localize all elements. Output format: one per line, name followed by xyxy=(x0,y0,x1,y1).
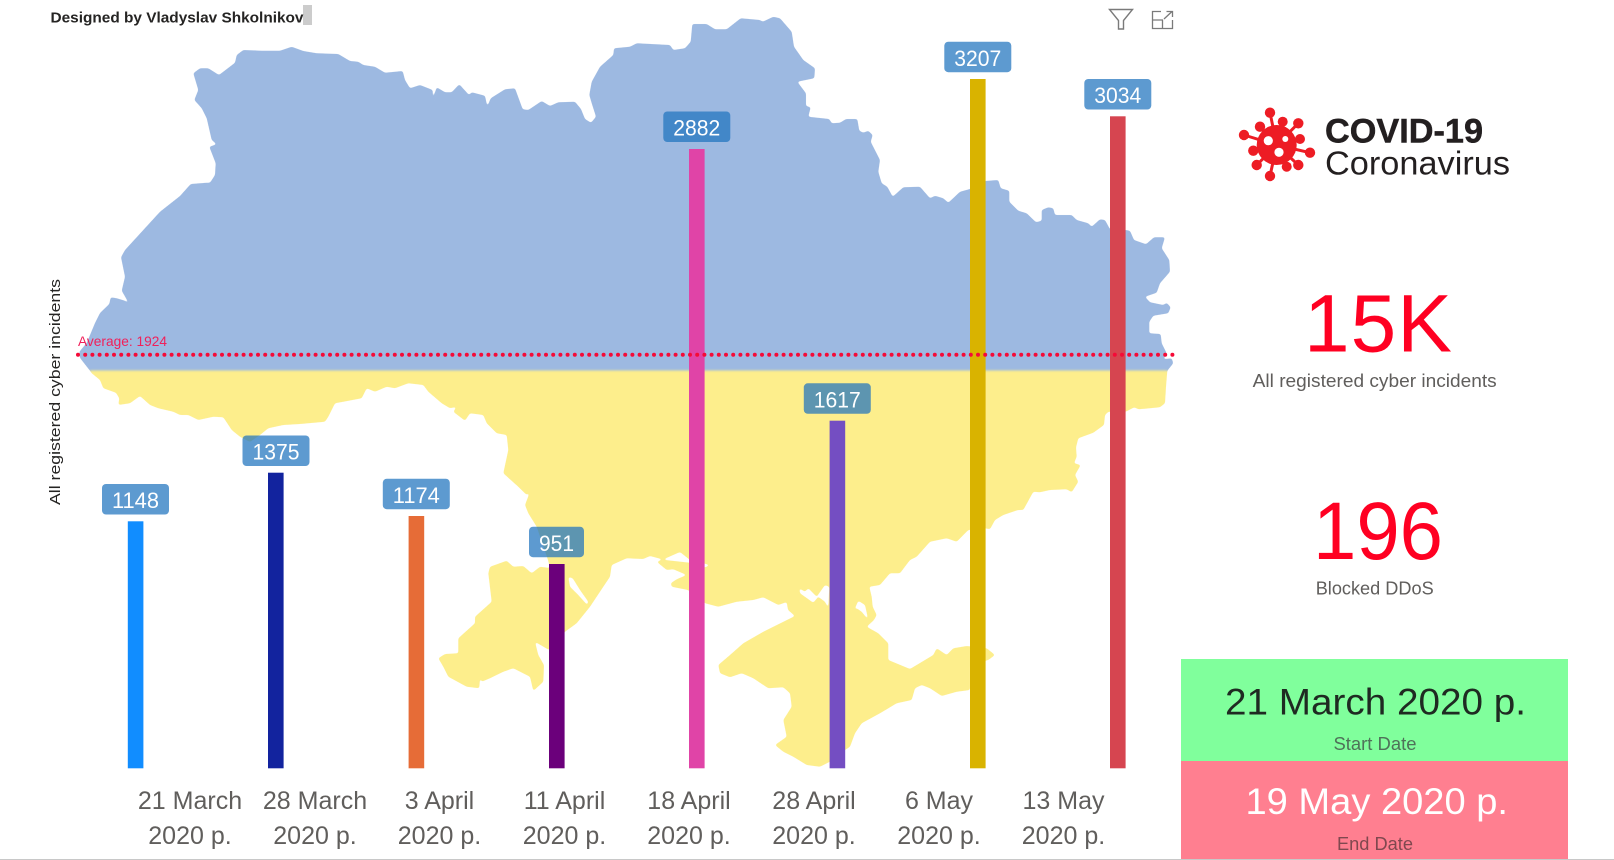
bar: 13 May: 3034 xyxy=(1094,83,1141,108)
logo: COVID-19 Coronavirus xyxy=(1239,108,1510,182)
KPI: all registered cyber incidents: All registered cyber incidents xyxy=(1253,370,1497,391)
x axis labels: 11 April xyxy=(524,787,605,815)
bar: 28 March: 1375 xyxy=(252,440,300,465)
bar: 3 April: 1174 xyxy=(393,483,440,508)
bar: 21 March: 1148 xyxy=(112,488,159,513)
bar: 6 May xyxy=(944,42,1011,768)
x axis labels: 28 March xyxy=(263,787,367,815)
x axis labels: 6 May xyxy=(905,787,974,815)
bar: 28 March xyxy=(242,436,310,768)
panel: start date xyxy=(1181,659,1568,761)
panel: end date: 19 May 2020 р. xyxy=(1246,781,1508,822)
bar: 18 April xyxy=(663,112,730,768)
panel: end date xyxy=(1181,761,1568,859)
x axis labels: 3 April xyxy=(405,787,474,815)
average line: Average: 1924 xyxy=(78,333,167,349)
KPI: blocked DDoS: 196 xyxy=(1313,486,1443,577)
x axis labels: 13 May xyxy=(1023,787,1105,815)
bar: 6 May: 3207 xyxy=(954,46,1001,71)
axis title: All registered cyber incidents xyxy=(47,279,64,505)
icon: filter xyxy=(1110,10,1132,29)
icon: focus mode xyxy=(1152,12,1172,28)
KPI: all registered cyber incidents: 15K xyxy=(1304,278,1452,370)
x axis labels: 2020 р. xyxy=(273,822,357,850)
bar: 28 April: 1617 xyxy=(814,388,861,412)
panel: start date: Start Date xyxy=(1334,734,1416,754)
bar: 11 April: 951 xyxy=(539,531,574,556)
panel: end date: End Date xyxy=(1337,834,1413,854)
panel: start date: 21 March 2020 р. xyxy=(1225,682,1526,722)
bar: 21 March xyxy=(102,484,169,768)
bar chart: incidents per date xyxy=(102,42,1151,768)
bar: 11 April xyxy=(529,527,584,768)
x axis labels: 2020 р. xyxy=(772,822,856,850)
icon: virus xyxy=(1239,108,1315,181)
credit line: Designed by Vladyslav Shkolnikov xyxy=(50,10,304,26)
bar: 28 April xyxy=(804,383,871,768)
KPI: all registered cyber incidents xyxy=(1253,278,1497,391)
x axis labels: 2020 р. xyxy=(523,822,606,850)
x axis labels: 2020 р. xyxy=(398,822,481,850)
x axis labels: 2020 р. xyxy=(148,822,232,850)
x axis labels xyxy=(138,787,1105,850)
logo: COVID-19 Coronavirus: Coronavirus xyxy=(1325,144,1510,182)
x axis labels: 2020 р. xyxy=(897,822,981,850)
logo: COVID-19 Coronavirus: COVID-19 xyxy=(1325,112,1483,150)
x axis labels: 2020 р. xyxy=(647,822,731,850)
x axis labels: 28 April xyxy=(772,787,856,815)
x axis labels: 21 March xyxy=(138,787,242,815)
map: Ukraine in flag colours xyxy=(79,17,1173,767)
bar: 18 April: 2882 xyxy=(673,116,720,141)
bar: 3 April xyxy=(383,479,450,768)
KPI: blocked DDoS: Blocked DDoS xyxy=(1316,578,1434,598)
x axis labels: 18 April xyxy=(647,787,731,815)
x axis labels: 2020 р. xyxy=(1022,822,1105,850)
bar: 13 May xyxy=(1084,79,1151,768)
